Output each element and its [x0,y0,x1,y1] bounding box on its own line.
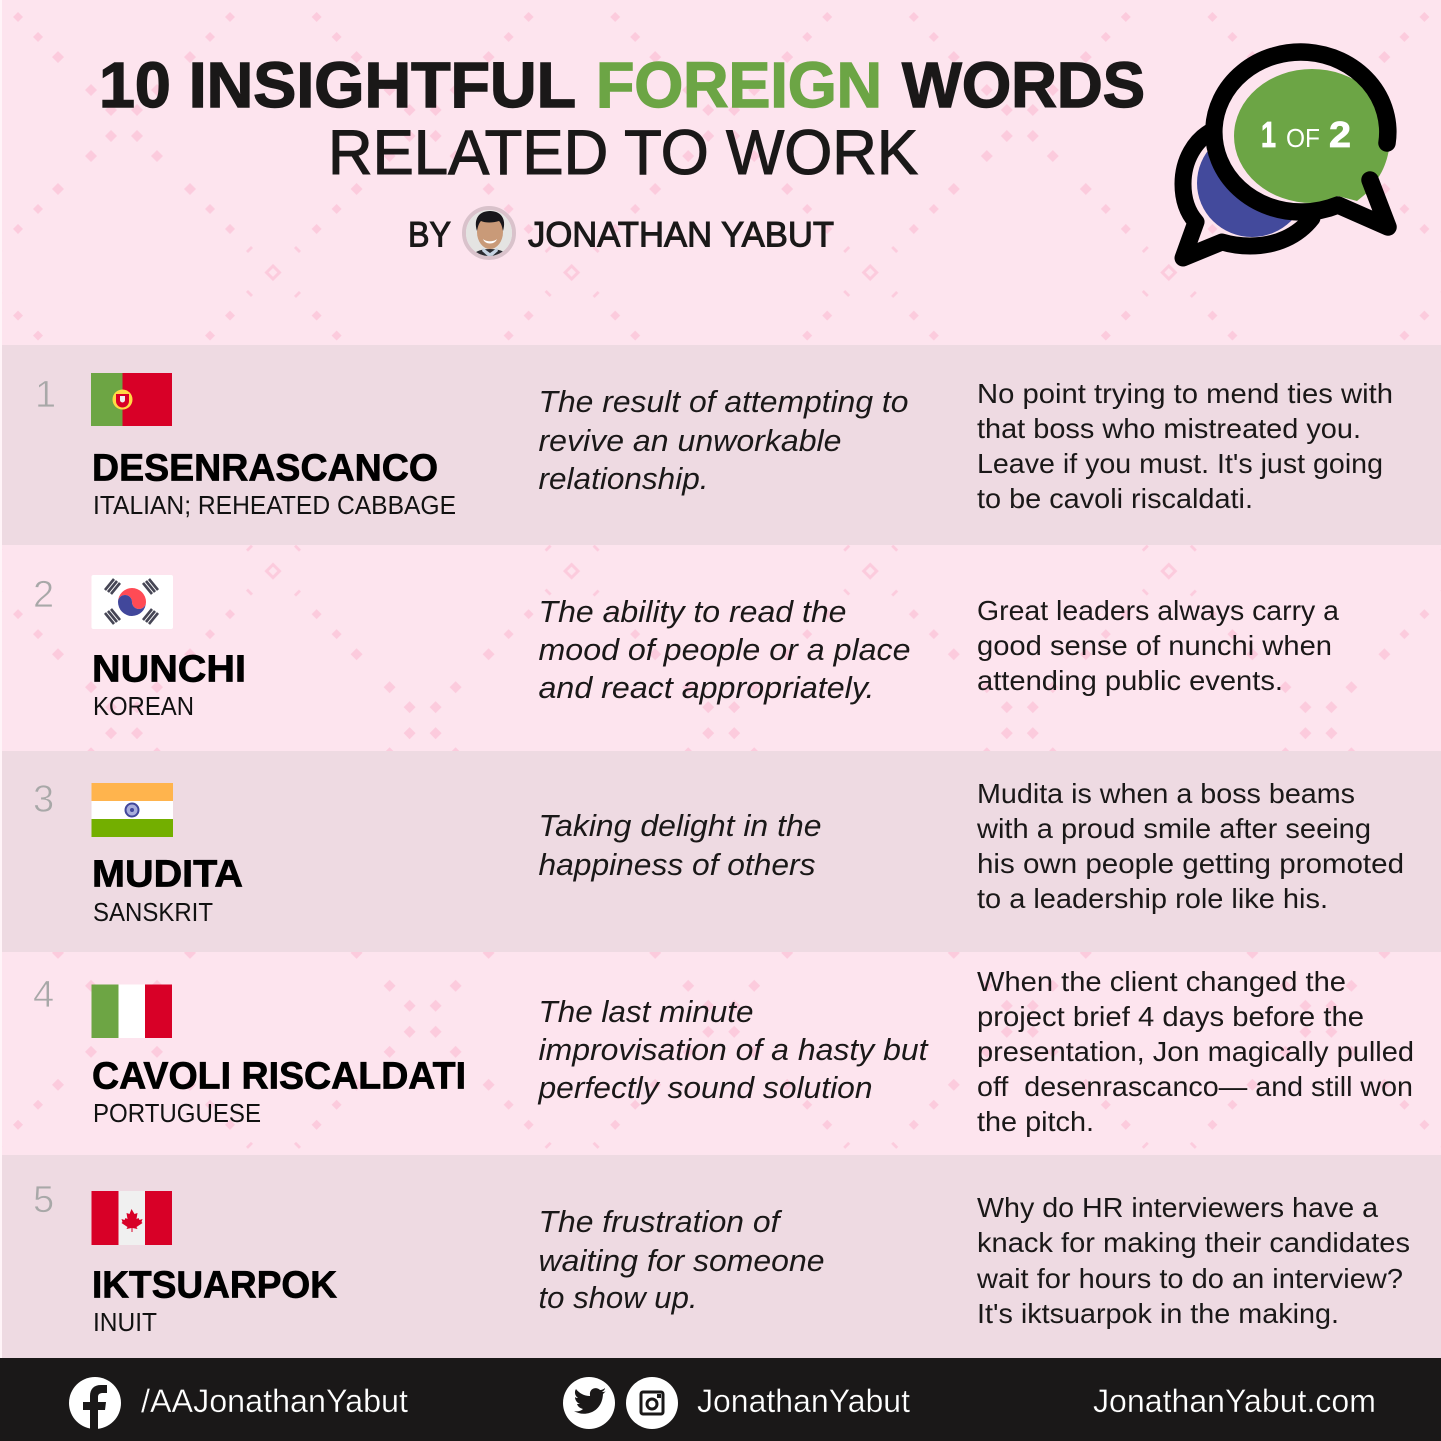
example: off desenrascanco— and still won [977,1071,1413,1102]
footer: JonathanYabut [697,1383,910,1419]
badge label: OF [1286,123,1320,153]
definition [538,808,822,882]
example [976,1192,1410,1329]
row 4: 4 [33,974,54,1016]
definition: The result of attempting to [538,384,908,419]
footer: /AAJonathanYabut [141,1383,408,1419]
row 3 [2,751,1441,952]
definition: The frustration of [538,1204,783,1239]
example: Leave if you must. It's just going [977,448,1383,479]
example: It's iktsuarpok in the making. [977,1298,1339,1329]
definition [538,384,908,496]
row 5: 5 [33,1179,54,1221]
example: to a leadership role like his. [977,883,1328,914]
row 4: CAVOLI RISCALDATI [92,1056,466,1098]
example: to be cavoli riscaldati. [977,483,1253,514]
title: FOREIGN [596,49,882,121]
icon: author portrait [464,208,514,258]
icon: instagram [626,1377,678,1429]
row 1: 1 [35,374,56,416]
row 1 [2,345,1441,545]
row 2: NUNCHI [92,648,246,690]
icon: speech bubbles, 1 of 2 [1183,52,1390,258]
definition [538,594,910,705]
definition: revive an unworkable [538,423,842,458]
footer: JonathanYabut.com [1093,1383,1376,1419]
flag: Italy [92,984,172,1038]
flag: Portugal [91,373,172,426]
example: with a proud smile after seeing [976,813,1371,844]
definition: to show up. [538,1280,698,1315]
example: that boss who mistreated you. [977,413,1361,444]
definition: relationship. [538,461,708,496]
title [99,49,1145,188]
row 4 [33,966,1414,1137]
title: 10 INSIGHTFUL [99,49,576,121]
row 5: INUIT [93,1307,157,1337]
row 1: ITALIAN; REHEATED CABBAGE [93,490,456,520]
example: the pitch. [977,1106,1094,1137]
badge label: 1 [1261,114,1276,155]
example [977,378,1393,514]
example: project brief 4 days before the [977,1001,1364,1032]
row 2: KOREAN [93,691,194,721]
definition: The last minute [538,994,754,1029]
badge label: 2 [1329,114,1351,155]
example: When the client changed the [977,966,1346,997]
example: Mudita is when a boss beams [977,778,1355,809]
definition: and react appropriately. [538,670,874,705]
example [977,595,1339,696]
example: presentation, Jon magically pulled [977,1036,1414,1067]
definition: waiting for someone [538,1243,824,1278]
footer [0,1358,1441,1441]
row 1: DESENRASCANCO [92,448,438,490]
example: Great leaders always carry a [977,595,1339,626]
example [976,778,1404,914]
title: RELATED TO WORK [328,118,918,188]
definition [538,1204,824,1315]
example: Why do HR interviewers have a [977,1192,1378,1223]
flag: India [92,783,173,837]
example [977,966,1414,1137]
flag: South Korea [92,575,173,629]
example: attending public events. [977,665,1283,696]
example: No point trying to mend ties with [977,378,1393,409]
definition: happiness of others [538,847,816,882]
row 3: 3 [33,778,54,820]
example: knack for making their candidates [977,1227,1410,1258]
row 3: MUDITA [92,854,243,896]
definition: mood of people or a place [538,632,910,667]
byline: BY [408,216,451,254]
row 2: 2 [33,574,54,616]
example: his own people getting promoted [977,848,1404,879]
icon: twitter [563,1377,615,1429]
row 5: IKTSUARPOK [92,1264,338,1306]
byline: JONATHAN YABUT [528,216,834,254]
definition: improvisation of a hasty but [538,1032,929,1067]
definition: Taking delight in the [538,808,822,843]
row 3: SANSKRIT [93,897,213,927]
flag: Canada [92,1191,172,1245]
icon: facebook [69,1377,121,1429]
title: WORDS [902,49,1145,121]
example: good sense of nunchi when [977,630,1332,661]
definition: The ability to read the [538,594,846,629]
example: wait for hours to do an interview? [976,1263,1403,1294]
byline [408,208,834,258]
definition [537,994,929,1105]
definition: perfectly sound solution [537,1070,872,1105]
row 4: PORTUGUESE [93,1098,261,1128]
row 2 [33,574,1339,721]
badge label [1261,114,1351,155]
row 5 [2,1155,1441,1358]
